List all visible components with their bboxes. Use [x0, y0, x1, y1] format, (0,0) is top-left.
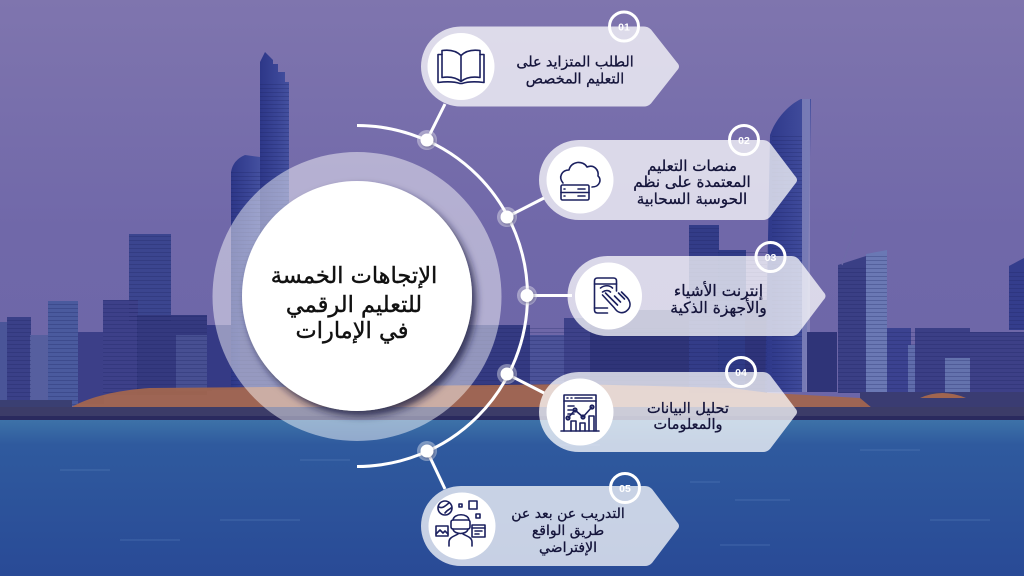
arrow pill 01: [421, 26, 679, 106]
label 05: التدريب عن بعد عن: [511, 506, 625, 522]
sky: [0, 0, 1024, 420]
label 02: الحوسبة السحابية: [637, 190, 747, 208]
centre halo ring: [212, 152, 502, 441]
icon circle: touch tablet: [575, 262, 642, 330]
panel: item 05: [421, 474, 679, 566]
sea ripples: [60, 445, 990, 545]
number badge 04: 04: [735, 367, 747, 379]
title: الإتجاهات الخمسة: [271, 263, 437, 289]
label 03: إنترنت الأشياء: [674, 281, 763, 300]
icon circle: data chart: [546, 378, 614, 446]
centre circle with title: [242, 181, 472, 411]
icon circle: virtual reality: [428, 492, 496, 560]
arrow pill 02: [539, 140, 797, 220]
panel: item 03: [568, 242, 826, 336]
number badge 05: 05: [619, 483, 631, 495]
panel: item 04: [539, 358, 797, 452]
number badge 02: [730, 126, 758, 154]
node dots on the arc: [417, 130, 537, 461]
sea: [0, 420, 1024, 576]
label 04: تحليل البيانات: [647, 401, 729, 417]
label 04: والمعلومات: [654, 417, 722, 433]
skyline: centre towers: [460, 99, 811, 393]
arrow pill 04: [539, 372, 797, 452]
panel: item 01: [421, 12, 679, 106]
skyline: right towers: [807, 226, 1024, 393]
number badge 05: [610, 474, 640, 502]
number badge 04: [726, 358, 756, 386]
arrow pill 03: [568, 256, 826, 336]
arc connecting the five items: [357, 126, 528, 466]
label 05: طريق الواقع: [532, 523, 604, 539]
skyline: left towers: [0, 52, 460, 406]
label 01: الطلب المتزايد على: [516, 54, 634, 70]
title: في الإمارات: [296, 318, 408, 344]
number badge 01: [610, 12, 638, 41]
panel: item 02: [539, 126, 797, 220]
connector lines: [427, 104, 572, 489]
arrow pill 05: [421, 486, 679, 566]
number badge 02: 02: [738, 135, 750, 147]
label 05: الإفتراضي: [539, 540, 597, 556]
building floor stripes: [7, 82, 1024, 406]
label 01: التعليم المخصص: [526, 72, 624, 88]
label 02: منصات التعليم: [647, 157, 737, 175]
title: للتعليم الرقمي: [286, 292, 422, 318]
number badge 01: 01: [618, 22, 630, 34]
label 03: والأجهزة الذكية: [670, 298, 767, 318]
label 02: المعتمدة على نظم: [633, 173, 751, 191]
icon circle: cloud server: [546, 146, 614, 214]
icon circle: open book: [428, 33, 494, 100]
number badge 03: [756, 242, 785, 272]
number badge 03: 03: [765, 252, 776, 264]
sand hill and shoreline: [0, 384, 1024, 421]
